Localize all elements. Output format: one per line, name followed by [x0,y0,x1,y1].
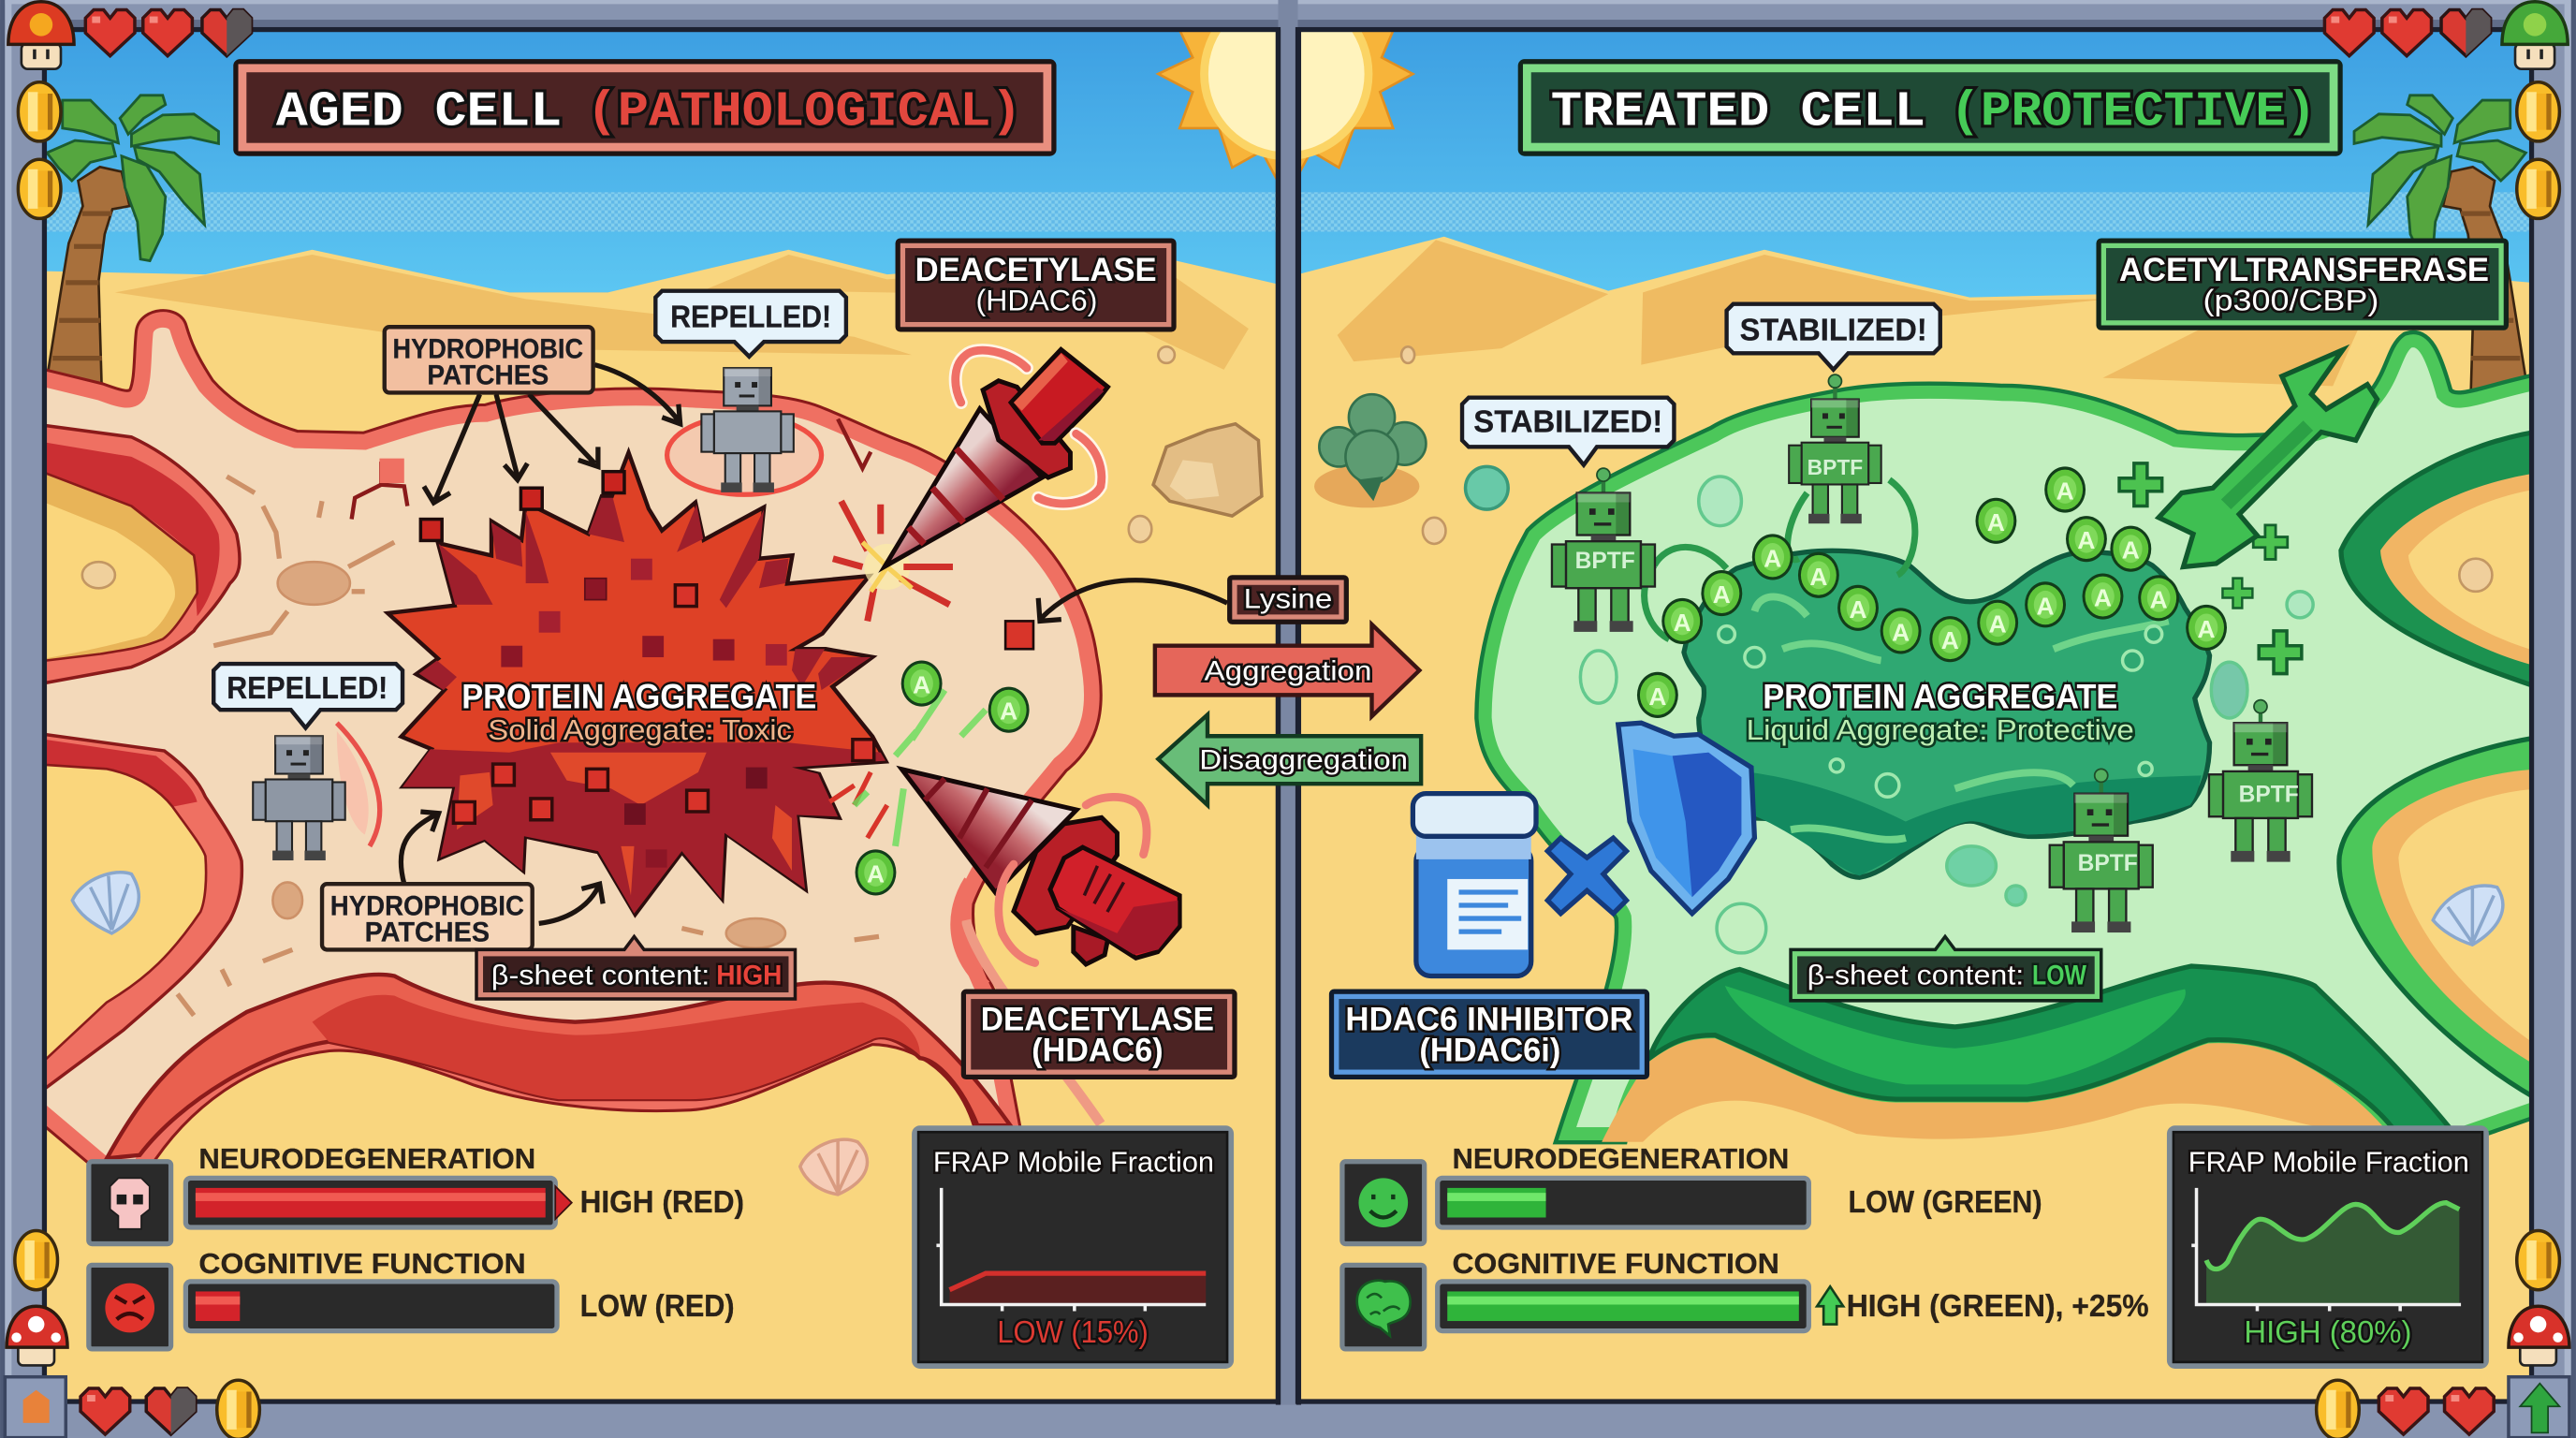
acetyl groups on aggregate [1637,466,2227,718]
sky left [44,30,1278,292]
spiky protein aggregate [388,452,886,915]
label: hydrophobic patches bottom [322,884,533,949]
icon: skull [89,1162,171,1244]
acetyl groups on aggregate: A [2150,585,2168,613]
stat: neurodegeneration treated: NEURODEGENERATION [1453,1142,1789,1175]
panel: treated cell scene [1298,30,2546,1401]
lower drill collar [1014,817,1117,933]
green robot 4: BPTF [2239,782,2299,807]
callout: stabilized top: STABILIZED! [1740,313,1927,347]
title: treated cell: (PROTECTIVE) [1950,83,2317,139]
lower drill handle [1050,847,1179,958]
green robot 2 [1552,468,1655,632]
membrane stub [379,459,404,483]
acetyl groups on aggregate: A [2094,584,2112,612]
lysine arrow [1038,580,1227,621]
label: beta-sheet high: HIGH [716,960,782,990]
arrow: aggregation [1155,624,1419,716]
chart: FRAP aged [915,1129,1231,1365]
rotation swirls upper [956,350,1102,504]
label: beta-sheet low: LOW [2032,960,2087,990]
hydrophobic patch squares [420,472,624,540]
aggregate caption right [1747,677,2134,746]
label: deacetylase bottom: (HDAC6) [1032,1033,1164,1069]
teal boulder [1466,466,1508,509]
label: beta-sheet low [1791,936,2101,1001]
callout: repelled left: REPELLED! [227,671,388,706]
upper left lobe [33,424,240,685]
aggregate caption right: PROTEIN AGGREGATE [1763,677,2117,715]
icon: blue X [1547,838,1627,914]
green robot 4 [2209,700,2312,862]
impact sparks upper [833,501,953,621]
treated cell body [1486,341,2546,1134]
arrow: disaggregation [1158,714,1421,805]
orange patches lower [457,753,792,895]
pebbles left [82,346,1175,588]
hud coins right [2517,82,2559,1290]
bottom membrane band right [1649,966,2454,1134]
dune shadows right [1338,240,2365,386]
acetyl groups on aggregate: A [2122,536,2140,565]
title: aged cell: AGED CELL [276,83,562,139]
label: hydrophobic patches top: PATCHES [427,360,549,391]
label: hydrophobic patches top [385,327,593,392]
label: lysine: Lysine [1244,583,1332,614]
hud mushroom bottom left [7,1306,67,1365]
outlined red squares [453,585,874,823]
green robot 3: BPTF [2078,851,2138,876]
callout: repelled left [213,664,402,727]
title: aged cell: (PATHOLOGICAL) [587,83,1022,139]
acetyl groups on aggregate: A [1764,544,1781,572]
acetyl groups on aggregate: A [1989,610,2007,638]
callout: repelled top [655,291,846,357]
upper right lobe [2341,431,2546,690]
label: hydrophobic patches bottom: PATCHES [365,917,490,948]
stat: cognitive function treated [1342,1247,2149,1349]
acetyl groups on aggregate: A [1713,580,1731,609]
label: deacetylase top: DEACETYLASE [915,252,1157,288]
green robot 1 [1789,374,1881,523]
hud hearts top left [85,10,252,56]
hud mushroom top left [8,2,74,69]
chart: FRAP treated [2170,1129,2485,1365]
acetyl groups on aggregate: A [1809,563,1827,591]
stat: cognitive function aged: COGNITIVE FUNCTION [198,1247,526,1280]
arrows from top hydrophobic label [424,365,681,503]
sky right [1298,30,2532,301]
aggregate caption: Solid Aggregate: Toxic [488,713,792,746]
icon: shield [1618,723,1754,914]
drill cone [885,409,1042,566]
crack in membrane top [352,419,871,520]
bottom membrane band [107,975,1010,1158]
acetyl groups on aged cell: A [867,859,885,888]
icon: wrench acetyltransferase [2159,350,2378,566]
label: HDAC6 inhibitor: (HDAC6i) [1419,1033,1560,1069]
label: acetyltransferase [2096,238,2509,330]
lower drill stem [1074,927,1107,964]
label: HDAC6 inhibitor [1329,990,1649,1079]
liquid protein aggregate [1684,550,2210,877]
acetyl groups on aggregate: A [1987,508,2005,536]
label: beta-sheet low: β-sheet content: [1808,960,2024,990]
lower left lobe [33,733,242,1097]
cytoplasm cracks and stains [178,477,879,1016]
hud item box bottom left [5,1377,66,1438]
label: HDAC6 inhibitor: HDAC6 INHIBITOR [1345,1001,1633,1037]
acetyl groups on aggregate: A [1674,609,1691,637]
palm tree left [44,95,218,394]
callout: stabilized top [1727,304,1940,370]
label: hydrophobic patches top: HYDROPHOBIC [393,334,583,365]
icon: inhibitor bottle [1412,794,1536,976]
sand ground right [1298,237,2532,1401]
lower right faint membrane strip [966,920,1101,1123]
label: deacetylase bottom [961,990,1237,1079]
stat: cognitive function aged [89,1247,735,1349]
aggregate squares [501,559,787,868]
stat: cognitive function treated: HIGH (GREEN), +25% [1847,1289,2149,1324]
icon: brain [1342,1265,1425,1349]
centre divider [1276,0,1301,1405]
hud mushroom top right [2502,2,2568,69]
title: treated cell [1518,59,2343,156]
rock [1153,424,1262,516]
stat: neurodegeneration aged: NEURODEGENERATION [198,1142,535,1175]
hud bottom left hearts and coin [80,1380,259,1438]
hud coins left [15,82,61,1290]
center labels [1155,575,1421,805]
aggregate caption [461,677,816,746]
label: beta-sheet high: β-sheet content: [491,960,710,990]
acetyl groups on aggregate: A [1892,618,1910,646]
acetyl groups on aggregate: A [2056,477,2074,506]
hud bottom right hearts and coin [2317,1380,2494,1438]
grey robot top with repel field [667,368,822,494]
stat: cognitive function aged: LOW (RED) [580,1289,735,1324]
label: acetyltransferase: ACETYLTRANSFERASE [2119,252,2489,288]
orange sand shadow under band [1602,1038,2392,1142]
aggregate caption right: Liquid Aggregate: Protective [1747,713,2134,746]
arrow: aggregation: Aggregation [1204,656,1372,687]
green robot 2: BPTF [1575,549,1635,574]
stat: neurodegeneration aged [89,1142,744,1244]
chart: FRAP aged: FRAP Mobile Fraction [933,1145,1214,1178]
acetyl groups on aggregate: A [2198,615,2216,643]
title: treated cell: TREATED CELL [1551,83,1925,139]
dune shadows left [115,255,1249,370]
lysine square [1005,621,1033,649]
dither band left [44,192,1278,231]
desert bush [1314,394,1426,507]
tether tendrils [1645,479,1915,639]
drill: deacetylase lower [901,770,1179,964]
label: lysine [1227,575,1349,624]
pebble right [1401,346,2492,592]
acetyl groups on aged cell [856,661,1030,895]
chart: FRAP treated: HIGH (80%) [2244,1315,2411,1350]
panel: aged cell scene [33,30,1278,1401]
acetyl groups on aggregate: A [1941,626,1959,654]
lower right lobe [2339,736,2546,1104]
drill: deacetylase upper [885,349,1107,566]
callout: stabilized left [1462,398,1674,465]
chart: FRAP aged: LOW (15%) [997,1315,1149,1350]
rotation swirls lower [999,797,1147,962]
stat: neurodegeneration treated: LOW (GREEN) [1848,1185,2042,1220]
impact sparks and green specks lower [829,690,986,846]
acetyl groups on aged cell: A [1000,697,1017,726]
lower drill cone [901,770,1076,892]
membrane strips near lower drill [956,881,986,986]
plus signs [2119,463,2302,674]
dark spike facets [419,498,871,690]
acetyl groups on aggregate: A [1849,595,1867,624]
green robot 3 [2050,769,2153,932]
aggregate caption: PROTEIN AGGREGATE [461,677,816,715]
acetyl groups on aggregate: A [2037,592,2055,620]
hud item box bottom right [2509,1377,2569,1438]
stat: cognitive function treated: COGNITIVE FUNCTION [1453,1247,1779,1280]
drill handle [1011,349,1107,443]
acetyl groups on aged cell: A [913,671,930,699]
title: aged cell [233,59,1057,156]
arrows from lower hydrophobic label [401,812,603,923]
sand ground left [44,250,1278,1401]
shell blue right [2433,886,2503,945]
label: hydrophobic patches bottom: HYDROPHOBIC [330,891,524,922]
label: beta-sheet high [476,936,795,999]
label: acetyltransferase: (p300/CBP) [2203,284,2378,317]
stat: neurodegeneration treated [1342,1142,2042,1244]
callout: stabilized left: STABILIZED! [1473,405,1662,440]
small bubbles [1580,477,2313,953]
green robot 1: BPTF [1808,455,1863,479]
stat: neurodegeneration aged: HIGH (RED) [580,1185,744,1220]
palm tree right [2354,95,2528,394]
shell blue left [72,873,139,933]
acetyl groups on aggregate: A [1648,682,1666,711]
acetyl groups on aggregate: A [2077,526,2095,554]
drill collar [983,381,1070,477]
grey robot left with repel field [253,723,380,860]
dither band right [1298,192,2532,231]
lower dark body [402,742,886,914]
hud hearts top right [2324,10,2491,56]
icon: smiley [1342,1162,1425,1244]
hud mushroom bottom right [2509,1306,2569,1365]
aged cell body [33,319,1091,1167]
label: deacetylase top [896,238,1177,332]
label: deacetylase bottom: DEACETYLASE [981,1001,1214,1037]
shell peach [800,1139,867,1195]
sun [1158,0,1412,198]
callout: repelled top: REPELLED! [670,300,831,334]
icon: angry face [89,1265,171,1349]
label: deacetylase top: (HDAC6) [976,284,1097,317]
arrow: disaggregation: Disaggregation [1199,744,1408,775]
chart: FRAP treated: FRAP Mobile Fraction [2188,1145,2469,1178]
